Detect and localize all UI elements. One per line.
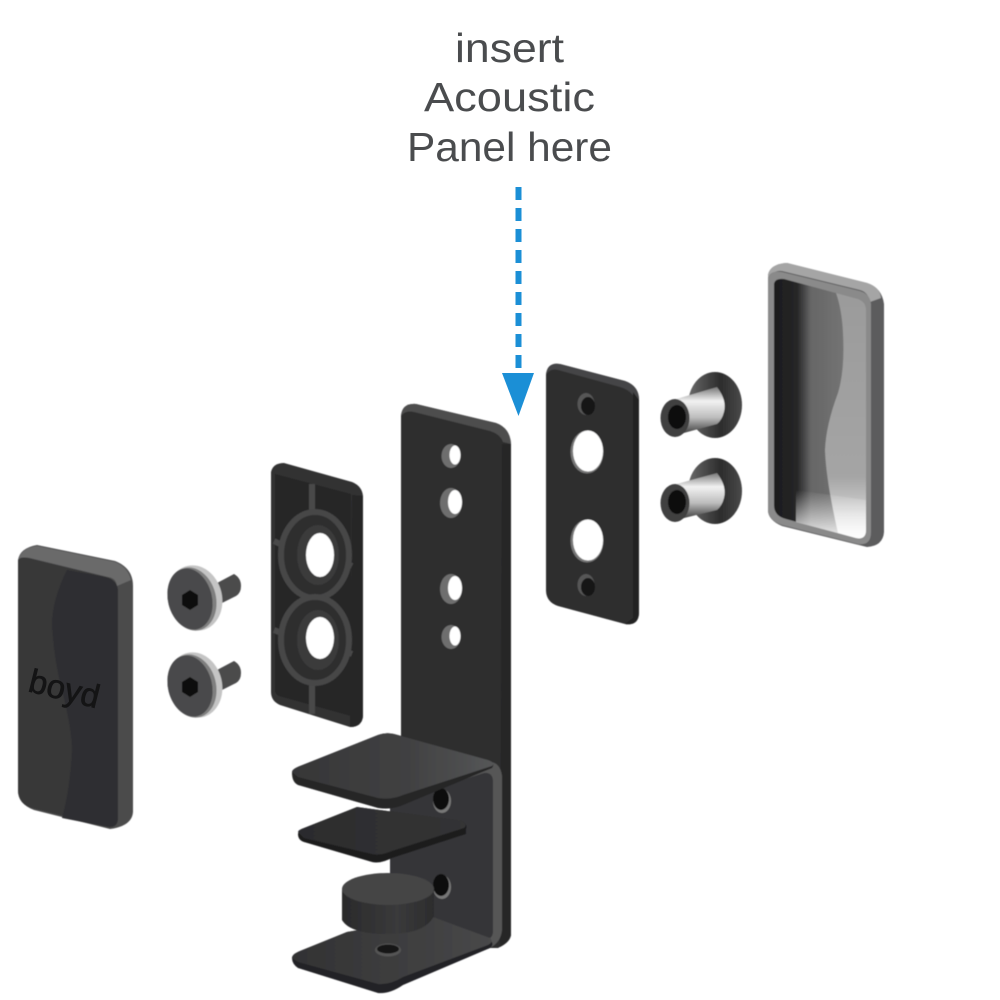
screw upper	[161, 559, 241, 637]
part: hollow end cap	[768, 263, 884, 547]
inner face	[390, 773, 493, 938]
heading: insert Acoustic Panel here: insert	[455, 25, 565, 71]
part: threaded inserts	[660, 372, 742, 524]
C rim	[400, 762, 502, 984]
part: L-shaped clamp bracket	[292, 404, 511, 993]
mounting holes	[442, 444, 460, 468]
part: cap with boyd logo	[18, 545, 133, 829]
back plate	[401, 404, 511, 948]
heading: insert Acoustic Panel here: Panel here	[407, 124, 612, 170]
heading: insert Acoustic Panel here: Acoustic	[424, 74, 595, 120]
part: ribbed backing plate	[271, 463, 363, 727]
middle jaw	[298, 807, 466, 862]
hole upper	[433, 789, 451, 813]
logo: boyd wordmark: boyd	[25, 662, 104, 715]
insert upper	[660, 372, 742, 438]
screw lower	[161, 646, 241, 724]
knob	[342, 889, 434, 934]
arrow: dashed blue down arrow	[502, 187, 534, 416]
bottom jaw	[292, 917, 492, 993]
insert lower	[660, 458, 742, 524]
heading: insert Acoustic Panel here	[407, 25, 612, 170]
part: flat plate with two holes	[546, 364, 639, 624]
hole lower	[433, 875, 451, 899]
top jaw	[292, 733, 493, 809]
part: hex screws	[161, 559, 241, 724]
